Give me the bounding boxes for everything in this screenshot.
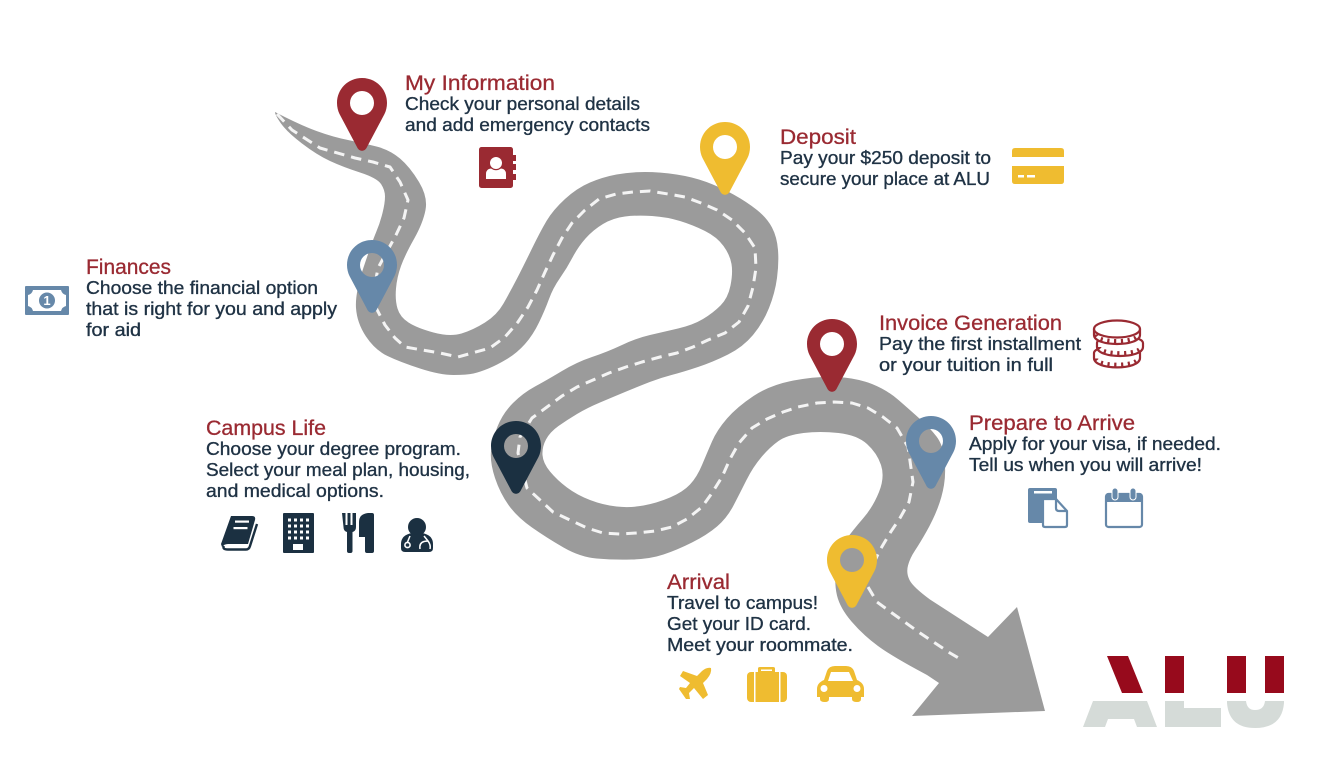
text (969, 433, 1221, 475)
panel: arrival (667, 535, 877, 702)
heading: My Information (405, 71, 555, 95)
panel: invoice generation (807, 311, 1143, 392)
icon: banknote: 1 (43, 293, 51, 308)
panel: campus life (206, 416, 541, 553)
icon: documents (1028, 488, 1067, 527)
winding road with arrow (275, 112, 1045, 716)
text (780, 147, 991, 189)
heading: Invoice Generation (879, 311, 1062, 335)
text (206, 438, 470, 501)
icon: contact book (479, 147, 516, 188)
text: Pay the first installment (879, 333, 1081, 354)
panel: prepare to arrive (906, 411, 1221, 527)
heading: Campus Life (206, 416, 326, 440)
text: Select your meal plan, housing, (206, 459, 470, 480)
text: secure your place at ALU (780, 168, 990, 189)
text (879, 333, 1081, 375)
heading: Arrival (667, 570, 730, 594)
text: Meet your roommate. (667, 634, 853, 655)
heading: Finances (86, 255, 171, 279)
text: Tell us when you will arrive! (969, 454, 1202, 475)
text: that is right for you and apply (86, 298, 338, 319)
text (86, 277, 338, 340)
text: Apply for your visa, if needed. (969, 433, 1221, 454)
icon: banknote (25, 286, 69, 315)
pin: navy (491, 421, 541, 494)
panel: my information (337, 71, 650, 188)
text: Check your personal details (405, 93, 640, 114)
icon: suitcase (747, 667, 787, 702)
text: Choose the financial option (86, 277, 318, 298)
icon: car (817, 666, 864, 702)
text: for aid (86, 319, 141, 340)
text: and add emergency contacts (405, 114, 650, 135)
icon: calendar (1106, 488, 1142, 527)
text: Pay your $250 deposit to (780, 147, 991, 168)
text (405, 93, 650, 135)
panel: finances (25, 240, 397, 340)
panel: deposit (700, 122, 1064, 195)
icon: doctor (401, 518, 433, 552)
text: or your tuition in full (879, 354, 1053, 375)
pin: red (337, 78, 387, 151)
pin: red (807, 319, 857, 392)
text (667, 592, 853, 655)
text: Get your ID card. (667, 613, 811, 634)
icon: building (283, 513, 314, 553)
pin: blue (906, 416, 956, 489)
text: and medical options. (206, 480, 384, 501)
icon: book (221, 516, 257, 550)
icon: airplane (679, 668, 711, 699)
icon: coins (1094, 320, 1143, 367)
heading: Deposit (780, 125, 856, 149)
icon: credit card (1012, 148, 1064, 184)
pin: yellow (700, 122, 750, 195)
text: Travel to campus! (667, 592, 818, 613)
pin: yellow (827, 535, 877, 608)
pin: blue (347, 240, 397, 313)
text: Choose your degree program. (206, 438, 461, 459)
icon: fork and knife (342, 513, 374, 553)
heading: Prepare to Arrive (969, 411, 1135, 435)
ALU logo (1083, 656, 1284, 728)
